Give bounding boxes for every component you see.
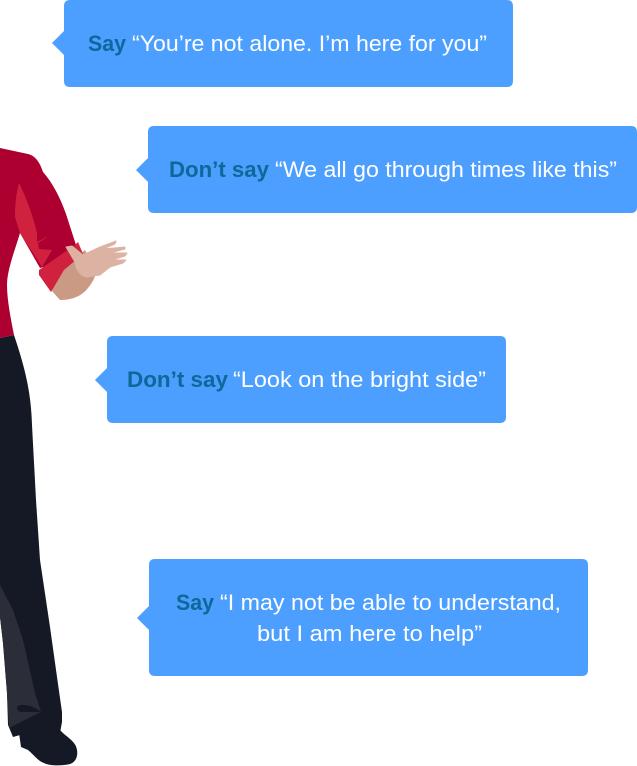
callout: say here to help: but I am here to help” <box>257 621 482 646</box>
trousers <box>0 335 62 737</box>
callout: don't say bright side: “Look on the bright side” <box>233 367 486 392</box>
callout: say here to help: Say <box>176 590 215 615</box>
cuff <box>39 242 83 292</box>
figure: person <box>0 148 127 765</box>
callout: say here to help <box>137 559 588 676</box>
hand <box>66 241 127 277</box>
trouser crease <box>17 705 41 712</box>
wrist <box>52 250 96 300</box>
callout: don't say bright side: Don’t say <box>127 367 229 392</box>
callout: don't say bright side <box>95 336 506 423</box>
callout: don't say times like this: Don’t say <box>169 157 270 182</box>
sleeve highlight <box>15 183 52 267</box>
callout: say not alone: Say <box>88 31 127 56</box>
callout: say here to help: “I may not be able to understand, <box>220 590 561 615</box>
shirt <box>0 148 76 338</box>
callout: say not alone: “You’re not alone. I’m here for you” <box>132 31 487 56</box>
shoe <box>19 730 77 765</box>
callout: don't say times like this: “We all go through times like this” <box>275 157 617 182</box>
trouser shadow panel <box>0 585 41 728</box>
callout: don't say times like this <box>136 126 637 213</box>
callout: say not alone <box>52 0 513 87</box>
